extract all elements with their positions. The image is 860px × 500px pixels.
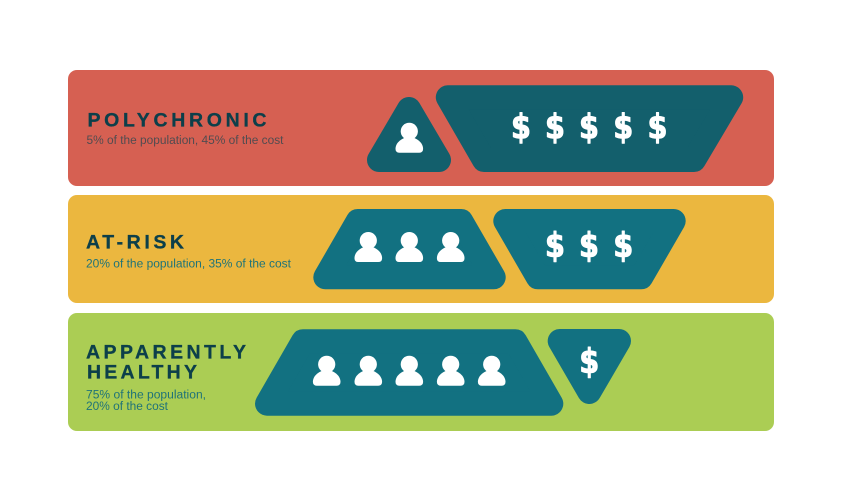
icon: person [396,123,423,153]
panel: apparently healthy [68,313,774,431]
panel background [68,195,774,303]
cost triangle [560,341,619,392]
icons: five people [313,356,506,386]
population trapezoid [267,341,551,404]
heading: AT-RISK [86,231,184,253]
icons: three people [354,232,465,262]
icons: five dollar signs: $ [579,108,599,148]
description: 75% of the population, [86,389,206,401]
panel: at-risk [68,195,774,303]
icons: five dollar signs: $ [613,108,633,148]
icons: five dollar signs [511,108,668,148]
icons: three dollar signs [545,226,633,266]
population triangle [379,109,439,160]
icons: three dollar signs: $ [545,226,565,266]
panel background [68,313,774,431]
heading: APPARENTLY [86,341,246,363]
icons: three dollar signs: $ [579,226,599,266]
panel background [68,70,774,186]
description: 20% of the cost [86,401,169,413]
cost trapezoid [448,97,731,160]
icons: three dollar signs: $ [613,226,633,266]
population trapezoid [325,221,494,277]
icons: five dollar signs: $ [648,108,668,148]
cost trapezoid [505,221,674,277]
heading: HEALTHY [87,361,197,383]
panel: polychronic [68,70,774,186]
description: 20% of the population, 35% of the cost [86,259,292,271]
description: 5% of the population, 45% of the cost [86,135,284,147]
icon: dollar sign: $ [579,342,599,382]
icons: five dollar signs: $ [511,108,531,148]
icons: five dollar signs: $ [545,108,565,148]
heading: POLYCHRONIC [88,110,266,132]
